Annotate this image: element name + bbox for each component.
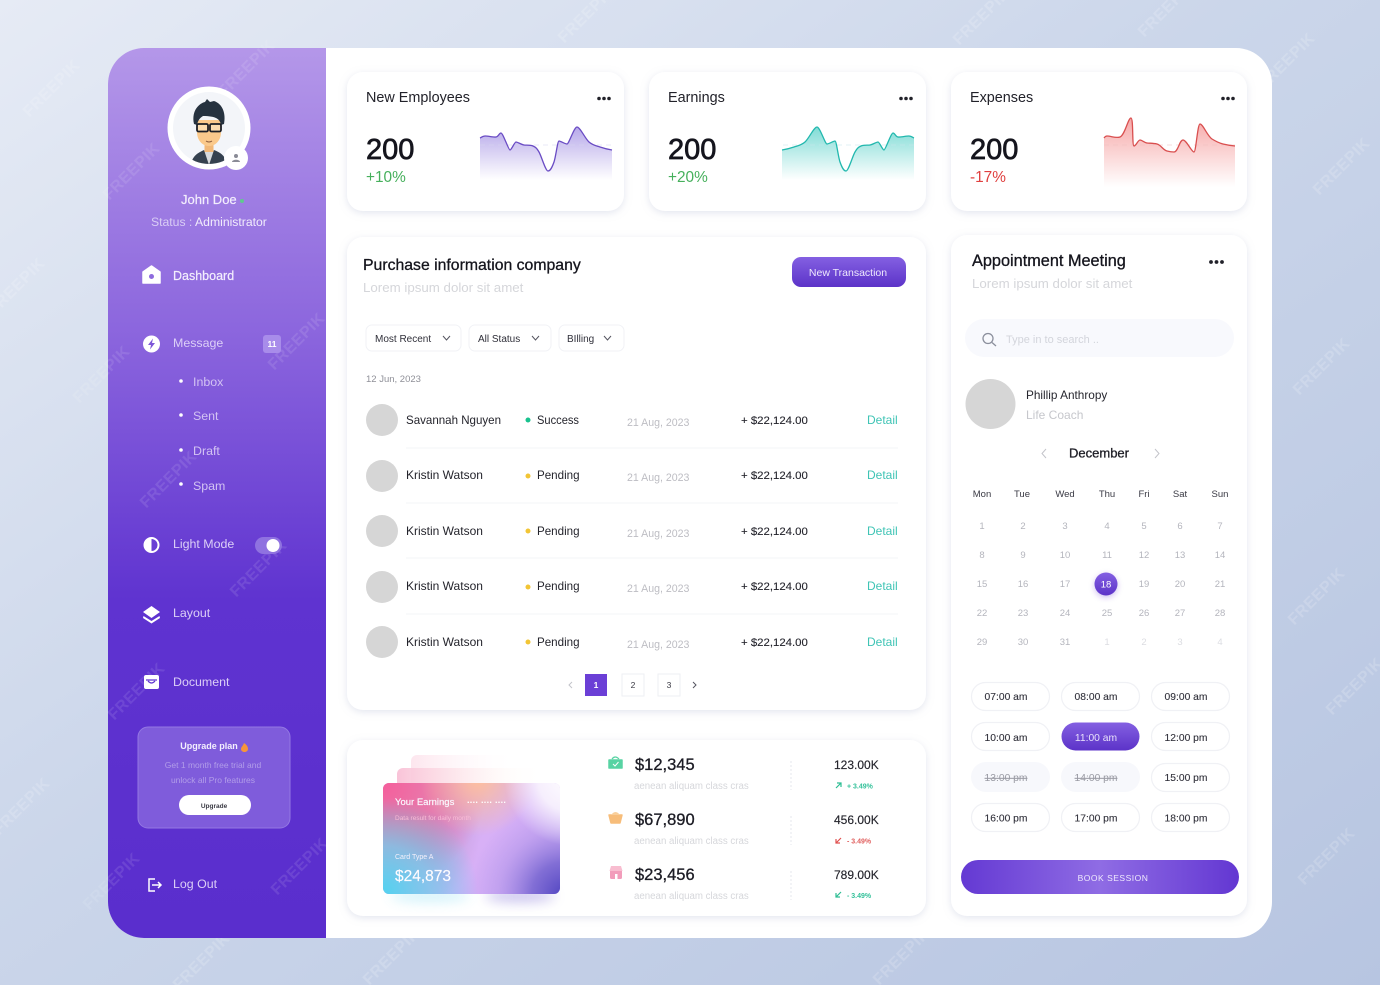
stat row 3: 789.00K: [834, 868, 879, 882]
stat row 2: - 3.49%: [847, 838, 872, 846]
stat row 1: [609, 756, 879, 792]
filter: all status: [469, 325, 551, 351]
search box: Type in to search ..: [1006, 334, 1099, 346]
time slots: 10:00 am: [985, 733, 1027, 744]
calendar: 1: [1104, 637, 1110, 648]
calendar: 17: [1060, 579, 1070, 590]
pagination: 1: [594, 680, 599, 690]
user status: Status : Administrator: [151, 215, 267, 229]
text: FREEPIK: [1255, 30, 1319, 94]
calendar: [973, 489, 1228, 648]
time slots: 18:00 pm: [1165, 814, 1207, 824]
calendar: 2: [1141, 637, 1147, 648]
panel: new employees: [347, 72, 624, 211]
table row 1: 21 Aug, 2023: [627, 417, 690, 429]
table row 5: + $22,124.00: [741, 637, 808, 649]
submenu: message items: Sent: [193, 409, 219, 423]
table row 3: 21 Aug, 2023: [627, 528, 690, 540]
panel: sidebar: FREEPIK: [100, 140, 164, 204]
calendar: Wed: [1055, 489, 1075, 500]
earnings heading: Earnings: [668, 90, 725, 106]
book session button: [961, 860, 1239, 894]
filter: billing: [559, 325, 624, 351]
calendar: 4: [1104, 521, 1110, 532]
table row 5: Pending: [537, 636, 580, 649]
calendar: 6: [1177, 521, 1183, 532]
table row 3: Pending: [537, 525, 580, 538]
earnings card stack: Your Earnings: [395, 797, 455, 808]
table row 4: Pending: [537, 580, 580, 593]
filter: most recent: [366, 325, 461, 351]
nav: document: Document: [173, 675, 230, 689]
time slots: 16:00 pm: [985, 814, 1027, 824]
pagination: 3: [667, 680, 672, 690]
nav: layout: [143, 606, 211, 624]
table row 1: Success: [537, 414, 579, 427]
time slots: 15:00 pm: [1165, 773, 1207, 784]
table row 2: [366, 460, 898, 492]
text: FREEPIK: [20, 57, 84, 121]
menu dots: [899, 97, 913, 100]
table row 3: Kristin Watson: [406, 524, 483, 538]
submenu: message items: [179, 375, 225, 493]
table row 5: Kristin Watson: [406, 635, 483, 649]
calendar: 16: [1018, 579, 1028, 590]
expenses value: 200: [970, 134, 1018, 166]
calendar: 4: [1217, 637, 1223, 648]
upgrade plan card: Get 1 month free trial and: [165, 760, 261, 770]
calendar: 19: [1139, 579, 1149, 590]
calendar: Mon: [973, 489, 991, 500]
table row 2: Detail: [867, 468, 898, 482]
calendar: 10: [1060, 550, 1070, 561]
earnings card stack: Data result for daily month: [395, 815, 471, 822]
time slots: 08:00 am: [1075, 692, 1117, 703]
month selector: December: [1069, 446, 1130, 460]
table row 4: Kristin Watson: [406, 579, 483, 593]
coach profile: Life Coach: [1026, 408, 1083, 422]
calendar: 13: [1175, 550, 1185, 561]
stat row 2: 456.00K: [834, 813, 879, 827]
earnings card stack: .... .... ....: [467, 795, 506, 805]
nav: message: [143, 335, 281, 353]
appointment subtitle: Lorem ipsum dolor sit amet: [972, 276, 1133, 291]
calendar: Thu: [1099, 489, 1115, 500]
nav: dashboard: [143, 266, 234, 283]
profile badge icon: [224, 146, 248, 170]
employees value: 200: [366, 134, 414, 166]
calendar: 30: [1018, 637, 1028, 648]
text: FREEPIK: [1295, 825, 1359, 889]
calendar: Sun: [1212, 489, 1228, 500]
table row 1: + $22,124.00: [741, 415, 808, 427]
text: FREEPIK: [1285, 565, 1349, 629]
earnings card stack: [383, 755, 560, 902]
month selector: [1042, 446, 1159, 460]
earnings card stack: $24,873: [395, 868, 451, 885]
upgrade plan card: [138, 727, 290, 828]
panel: sidebar: FREEPIK: [70, 343, 134, 407]
calendar: 14: [1215, 550, 1225, 561]
table row 3: [366, 515, 898, 547]
table row 5: [366, 626, 898, 658]
calendar: 31: [1060, 637, 1070, 648]
earnings value: 200: [668, 134, 716, 166]
nav: light mode toggle: Light Mode: [173, 537, 234, 551]
calendar: 2: [1020, 521, 1026, 532]
upgrade plan card: Upgrade plan: [180, 741, 238, 751]
table row 5: 21 Aug, 2023: [627, 639, 690, 651]
calendar: 24: [1060, 608, 1070, 619]
expenses heading: Expenses: [970, 90, 1033, 106]
calendar: 11: [1102, 550, 1112, 561]
new employees heading: New Employees: [366, 90, 470, 106]
book session button: BOOK SESSION: [1078, 873, 1148, 883]
stat row 1: + 3.49%: [847, 784, 874, 790]
calendar: 20: [1175, 579, 1185, 590]
dashboard window: [108, 48, 1272, 938]
table row 5: Detail: [867, 635, 898, 649]
table row 4: Detail: [867, 579, 898, 593]
menu dots: [597, 97, 611, 100]
table row 2: Pending: [537, 469, 580, 482]
area chart: employees: [480, 127, 612, 180]
nav: log out: Log Out: [173, 877, 218, 891]
stat row 3: [610, 866, 879, 902]
time slots: 17:00 pm: [1075, 814, 1117, 824]
calendar: 26: [1139, 608, 1149, 619]
stat row 1: $12,345: [635, 756, 695, 774]
appointment heading: Appointment Meeting: [972, 252, 1126, 270]
table row 4: 21 Aug, 2023: [627, 583, 690, 595]
pagination: 2: [631, 680, 636, 690]
coach profile: Phillip Anthropy: [1026, 388, 1107, 402]
calendar: 5: [1141, 521, 1147, 532]
calendar: 15: [977, 579, 987, 590]
submenu: message items: Draft: [193, 444, 220, 458]
panel: sidebar: FREEPIK: [80, 850, 144, 914]
earnings change: +20%: [668, 169, 708, 186]
calendar: 27: [1175, 608, 1185, 619]
new transaction button: [792, 257, 906, 287]
stat row 2: [609, 811, 879, 847]
table row 2: + $22,124.00: [741, 470, 808, 482]
stat row 1: aenean aliquam class cras: [634, 781, 749, 792]
calendar: 18: [1101, 580, 1111, 590]
calendar: 8: [979, 550, 985, 561]
employees change: +10%: [366, 169, 406, 186]
calendar: Sat: [1173, 489, 1187, 500]
table row 2: Kristin Watson: [406, 468, 483, 482]
calendar: 25: [1102, 608, 1112, 619]
panel: appointment meeting: [951, 235, 1247, 916]
panel: earnings summary: [347, 740, 926, 916]
table row 4: [366, 571, 898, 603]
table row 3: Detail: [867, 524, 898, 538]
user name: John Doe: [181, 192, 237, 207]
submenu: message items: Spam: [193, 479, 225, 493]
stat row 3: aenean aliquam class cras: [634, 891, 749, 902]
time slots: 09:00 am: [1165, 692, 1207, 703]
time slots: 14:00 pm: [1075, 773, 1117, 784]
time slots: 07:00 am: [985, 692, 1027, 703]
stat row 3: - 3.49%: [847, 893, 872, 900]
table row 1: [366, 404, 898, 436]
calendar: 7: [1217, 521, 1223, 532]
calendar: 9: [1020, 550, 1026, 561]
earnings card stack: Card Type A: [395, 854, 434, 861]
panel: sidebar: FREEPIK: [227, 537, 291, 601]
calendar: 23: [1018, 608, 1028, 619]
menu dots: [1221, 97, 1235, 100]
stat row 2: aenean aliquam class cras: [634, 836, 749, 847]
nav: layout: Layout: [173, 606, 211, 620]
nav: document: [144, 675, 230, 689]
table row 3: + $22,124.00: [741, 526, 808, 538]
table row 1: Savannah Nguyen: [406, 413, 501, 427]
panel: purchase information: [347, 237, 926, 710]
area chart: earnings: [782, 127, 914, 180]
profile avatar: [168, 86, 250, 170]
filter: billing: BIlling: [567, 334, 594, 345]
panel: sidebar: [108, 48, 326, 938]
text: FREEPIK: [1310, 135, 1374, 199]
calendar: 22: [977, 608, 987, 619]
purchase subtitle: Lorem ipsum dolor sit amet: [363, 280, 524, 295]
nav: dashboard: Dashboard: [173, 269, 234, 283]
nav: light mode toggle: [144, 537, 282, 554]
calendar: 1: [979, 521, 985, 532]
time slots: 11:00 am: [1075, 733, 1117, 744]
online status dot: [240, 199, 244, 203]
menu dots: [1209, 260, 1224, 264]
table row 4: + $22,124.00: [741, 581, 808, 593]
panel: sidebar: FREEPIK: [265, 310, 329, 374]
purchase heading: Purchase information company: [363, 257, 581, 274]
calendar: 12: [1139, 550, 1149, 561]
time slots: 13:00 pm: [985, 773, 1027, 784]
filter: most recent: Most Recent: [375, 334, 431, 345]
upgrade plan card: unlock all Pro features: [171, 775, 255, 785]
time slots: 12:00 pm: [1165, 733, 1207, 744]
stat row 3: $23,456: [635, 866, 695, 884]
calendar: 28: [1215, 608, 1225, 619]
table row 2: 21 Aug, 2023: [627, 472, 690, 484]
nav: message: Message: [173, 336, 223, 350]
calendar: Tue: [1014, 489, 1030, 500]
panel: sidebar: FREEPIK: [137, 448, 201, 512]
pagination: [569, 674, 696, 696]
panel: sidebar: FREEPIK: [268, 835, 332, 899]
area chart: expenses: [1104, 118, 1235, 187]
stat row 2: $67,890: [635, 811, 695, 829]
date label: 12 Jun, 2023: [366, 374, 421, 385]
search box: [965, 319, 1234, 357]
nav: log out: [149, 877, 218, 891]
filter: all status: All Status: [478, 334, 520, 345]
coach profile: [966, 379, 1107, 429]
calendar: 3: [1062, 521, 1068, 532]
panel: sidebar: FREEPIK: [215, 37, 279, 101]
stat row 1: 123.00K: [834, 758, 879, 772]
new transaction button: New Transaction: [809, 267, 887, 279]
expenses change: -17%: [970, 169, 1006, 186]
panel: earnings: [649, 72, 926, 211]
submenu: message items: Inbox: [193, 375, 224, 389]
table row 1: Detail: [867, 413, 898, 427]
calendar: 29: [977, 637, 987, 648]
text: FREEPIK: [1290, 335, 1354, 399]
calendar: 21: [1215, 579, 1225, 590]
time slots: [971, 682, 1230, 832]
nav: message: 11: [268, 339, 277, 349]
panel: expenses: [951, 72, 1247, 211]
upgrade plan card: Upgrade: [201, 803, 228, 810]
panel: sidebar: FREEPIK: [105, 660, 169, 724]
calendar: Fri: [1138, 489, 1150, 500]
calendar: 3: [1177, 637, 1183, 648]
